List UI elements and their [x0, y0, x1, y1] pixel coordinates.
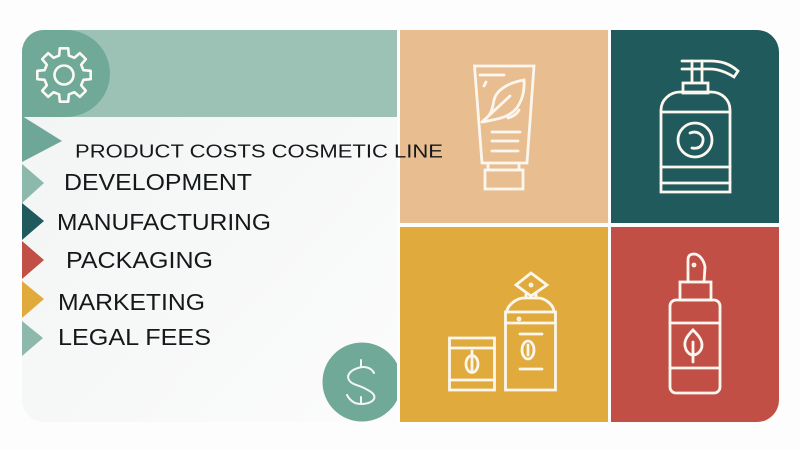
- arrow: development: [22, 164, 44, 203]
- label: development: DEVELOPMENT: [64, 169, 252, 195]
- label: packaging: PACKAGING: [66, 247, 213, 273]
- label: manufacturing: MANUFACTURING: [57, 209, 271, 235]
- panel: dropper tile: [611, 227, 779, 422]
- icon: leaf bottle: [670, 254, 720, 393]
- arrow: legal fees: [22, 321, 43, 356]
- dollar badge: [322, 342, 402, 422]
- panel: jars tile: [400, 227, 608, 422]
- panel: left costs list: [22, 30, 402, 422]
- panel: tube tile: [400, 30, 608, 223]
- arrow: title marker: [22, 116, 62, 162]
- icon: gear: [37, 48, 91, 102]
- header band: [22, 30, 397, 117]
- arrow: packaging: [22, 241, 44, 279]
- icon: dollar sign: [347, 360, 374, 404]
- icon: jar and spray can: [450, 273, 556, 390]
- title: PRODUCT COSTS COSMETIC LINE: [75, 142, 443, 162]
- icon: tube: [474, 66, 534, 189]
- icon: pump bottle: [661, 61, 738, 192]
- label: legal fees: LEGAL FEES: [58, 324, 211, 350]
- panel: pump tile: [611, 30, 779, 223]
- arrow: manufacturing: [22, 203, 44, 240]
- arrow: marketing: [22, 281, 44, 318]
- header gear badge: [22, 30, 110, 117]
- label: marketing: MARKETING: [58, 289, 205, 315]
